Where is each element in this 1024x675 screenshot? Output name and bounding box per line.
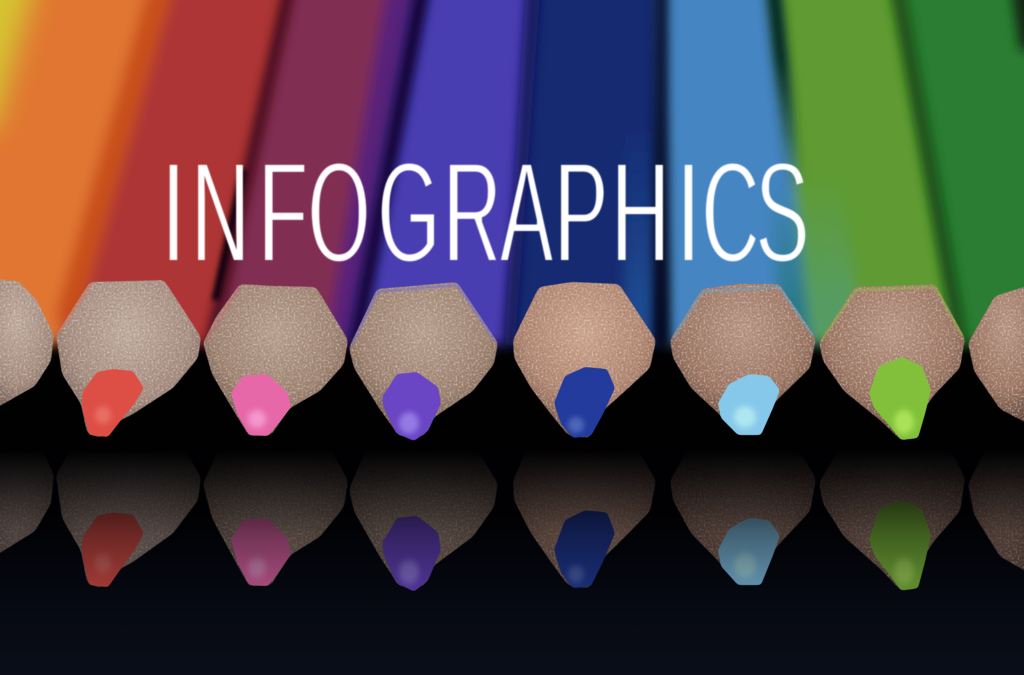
pencil tip: navy [513,282,656,438]
yellow pencil glow [0,0,42,130]
pencil bodies [0,0,1024,345]
pencil tip: light blue [670,284,816,435]
coloured rims along the top of each tip [59,285,962,344]
pencil tip: pink [203,284,348,436]
title: INFOGRAPHICS [162,132,809,293]
pencil tip: far right [968,281,1024,432]
reflection of the pencil tips [0,458,1024,591]
pink lead [231,374,291,436]
pencil tip: purple [349,282,498,441]
pencil tips row [0,278,1024,441]
pencil tip: green [819,284,965,440]
sharp dark crease between red and crimson pencils [212,170,247,300]
light blue lead [718,374,780,435]
green lead [869,357,931,440]
pencil tip: red [56,280,201,438]
dark gaps between pencils [205,0,1024,345]
pencil tip: far left [0,278,54,417]
navy lead [554,367,615,438]
red lead [82,369,144,437]
purple lead [382,372,441,441]
